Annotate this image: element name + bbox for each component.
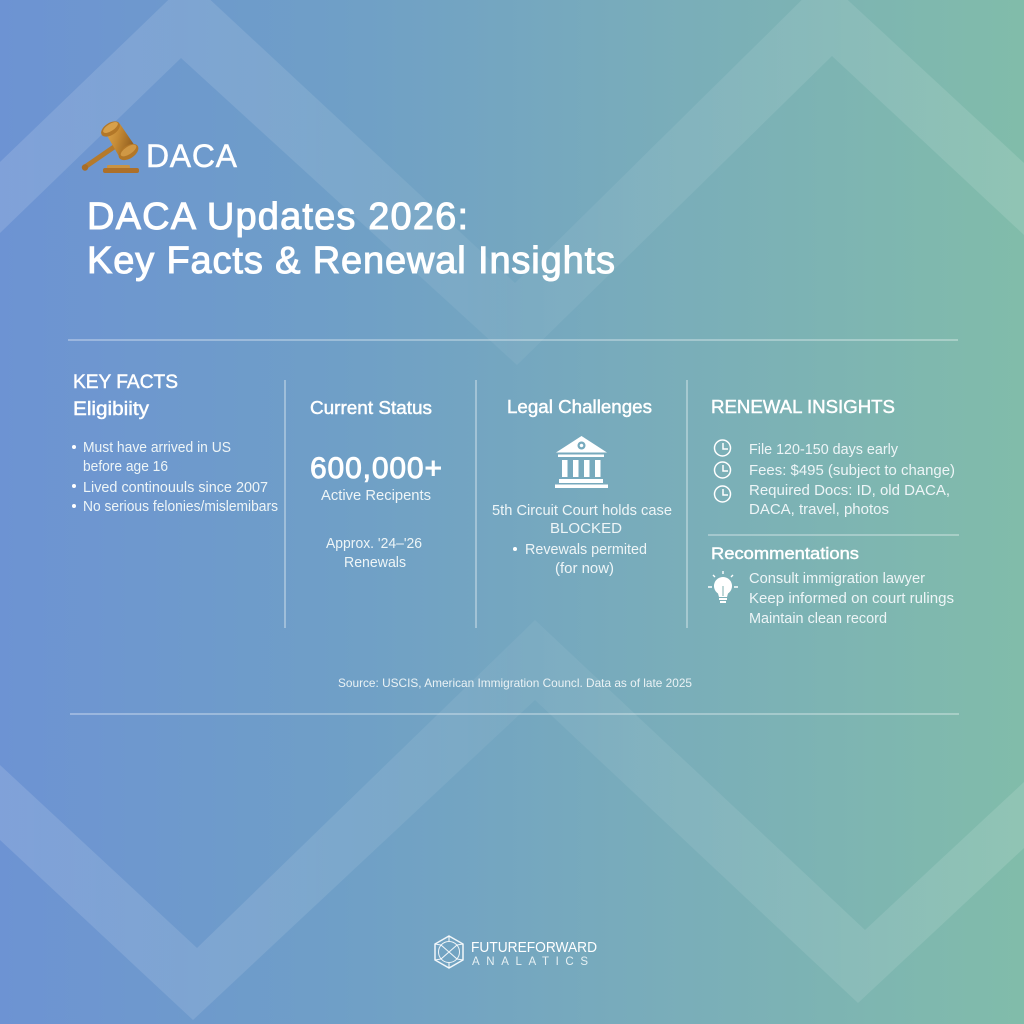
background chevron band: top (0, 0, 1024, 365)
source note: Source: USCIS, American Immigration Councl. Data as of late 2025 (338, 676, 692, 690)
panel: renewal insights (708, 397, 955, 627)
company name: FUTUREFORWARD (471, 939, 597, 956)
recommendations list: Maintain clean record (749, 611, 887, 627)
stat: active recipients: 600,000+ (310, 452, 442, 485)
title (87, 196, 615, 282)
icon: company logo (435, 936, 463, 968)
company name (471, 939, 597, 968)
stat label: Active Recipents (321, 488, 431, 504)
renewal details (749, 442, 955, 518)
heading: eligibility: Eligibiity (73, 399, 150, 420)
heading: legal challenges: Legal Challenges (507, 397, 652, 417)
legal status text: 5th Circuit Court holds case (492, 503, 672, 519)
divider lines (68, 340, 959, 714)
logo wordmark: DACA: DACA (146, 138, 238, 174)
renewal details: DACA, travel, photos (749, 502, 889, 518)
company name: ANALATICS (472, 956, 588, 968)
renewal details: Required Docs: ID, old DACA, (749, 483, 950, 499)
panel: current status (310, 398, 442, 571)
heading: key facts: KEY FACTS (73, 372, 178, 393)
renewals note: Renewals (344, 555, 406, 571)
panel: legal challenges (492, 397, 672, 577)
background chevron band: bottom (0, 620, 1024, 1020)
renewal details: File 120-150 days early (749, 442, 899, 458)
eligibility bullets: Must have arrived in US (83, 440, 231, 456)
eligibility bullets: Lived continouuls since 2007 (83, 480, 268, 496)
heading: renewal insights: RENEWAL INSIGHTS (711, 397, 895, 417)
legal status text: Revewals permited (525, 542, 647, 558)
title: DACA Updates 2026: (87, 196, 468, 238)
heading: recommendations: Recommentations (711, 544, 859, 563)
recommendations list: Consult immigration lawyer (749, 571, 925, 587)
renewal details: Fees: $495 (subject to change) (749, 463, 955, 479)
icon: courthouse (555, 436, 608, 488)
eligibility bullets: before age 16 (83, 459, 168, 475)
legal status text: (for now) (555, 561, 614, 577)
recommendations list (749, 571, 954, 627)
panel: key facts / eligibility (72, 372, 278, 515)
heading: current status: Current Status (310, 398, 432, 418)
title: Key Facts & Renewal Insights (87, 240, 615, 282)
renewals note (326, 536, 422, 571)
recommendations list: Keep informed on court rulings (749, 591, 954, 607)
eligibility bullets (72, 440, 278, 515)
eligibility bullets: No serious felonies/mislemibars (83, 499, 278, 515)
icon: gavel (82, 118, 141, 173)
legal status text: BLOCKED (550, 521, 622, 537)
icons: clocks (714, 440, 730, 502)
legal status text (492, 503, 672, 577)
renewals note: Approx. '24–'26 (326, 536, 422, 552)
icon: light bulb (708, 571, 738, 603)
